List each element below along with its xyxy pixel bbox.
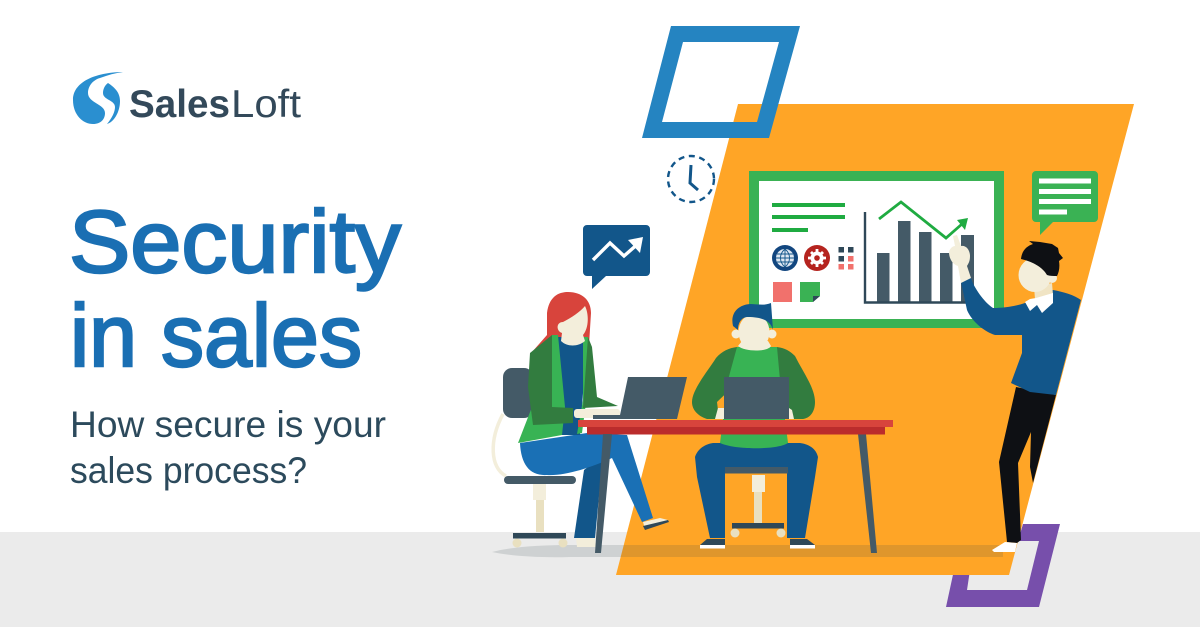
presenter hair [1021,241,1063,276]
man's chair seat [725,467,788,474]
woman's shoe front [643,518,669,530]
man's shoes [700,539,815,548]
man's laptop [724,377,789,419]
icon: chart speech bubble [583,225,650,289]
man's chair [730,475,786,538]
presenter hand [949,235,971,283]
man's trousers [695,443,818,538]
woman's hands [574,409,620,418]
presenter neck [1034,283,1053,299]
subtitle: How secure is your [70,404,386,445]
logo [73,72,301,126]
bar chart [865,202,974,302]
whiteboard text lines [772,203,845,232]
presenter sweater [961,278,1081,395]
icon: globe [772,245,798,271]
subtitle: sales process? [70,450,307,491]
purple frame [946,524,1060,607]
icon: gear [804,245,830,271]
title [69,192,401,385]
title: Security [69,192,401,291]
woman's chair [493,368,576,548]
orange parallelogram [616,104,1134,575]
floor shadow [492,545,1003,557]
icon: green speech bubble [1032,171,1098,235]
presenter figure [949,235,1081,552]
man's shirt [720,347,788,448]
woman's shoe back [576,538,596,547]
woman's front leg [520,433,653,522]
presenter face [1018,258,1052,292]
title: in sales [70,286,362,385]
man's sleeves [692,347,815,419]
logo: Loft [231,83,301,126]
woman's shirt [557,337,587,435]
man's face [738,314,770,350]
woman figure [518,292,669,547]
woman's laptop [593,377,687,419]
grey floor band [0,532,1200,627]
pink note [773,282,792,302]
presenter shoe [992,542,1017,552]
woman's back leg [574,455,603,538]
man's hair [732,303,773,330]
presenter ear [1047,273,1057,283]
logo wordmark: Sales [129,83,230,126]
woman's hair [532,292,591,352]
green sticky note [800,282,820,302]
logo mark [73,72,123,124]
table leg back [858,434,877,553]
panel: whiteboard [749,171,1004,328]
woman's light green jacket [518,335,589,443]
table [578,420,893,553]
icon: tile grid [838,247,854,270]
man's hands [715,408,794,419]
seated man figure [692,303,818,548]
man's neck [738,341,771,350]
woman's neck and face [558,306,588,346]
subtitle [70,404,386,491]
icon: clock [668,156,714,202]
man's ears [732,330,776,338]
presenter trousers [999,387,1056,543]
presenter collar [1025,293,1053,313]
woman's dark green sleeves [528,335,618,425]
blue frame [642,26,800,138]
